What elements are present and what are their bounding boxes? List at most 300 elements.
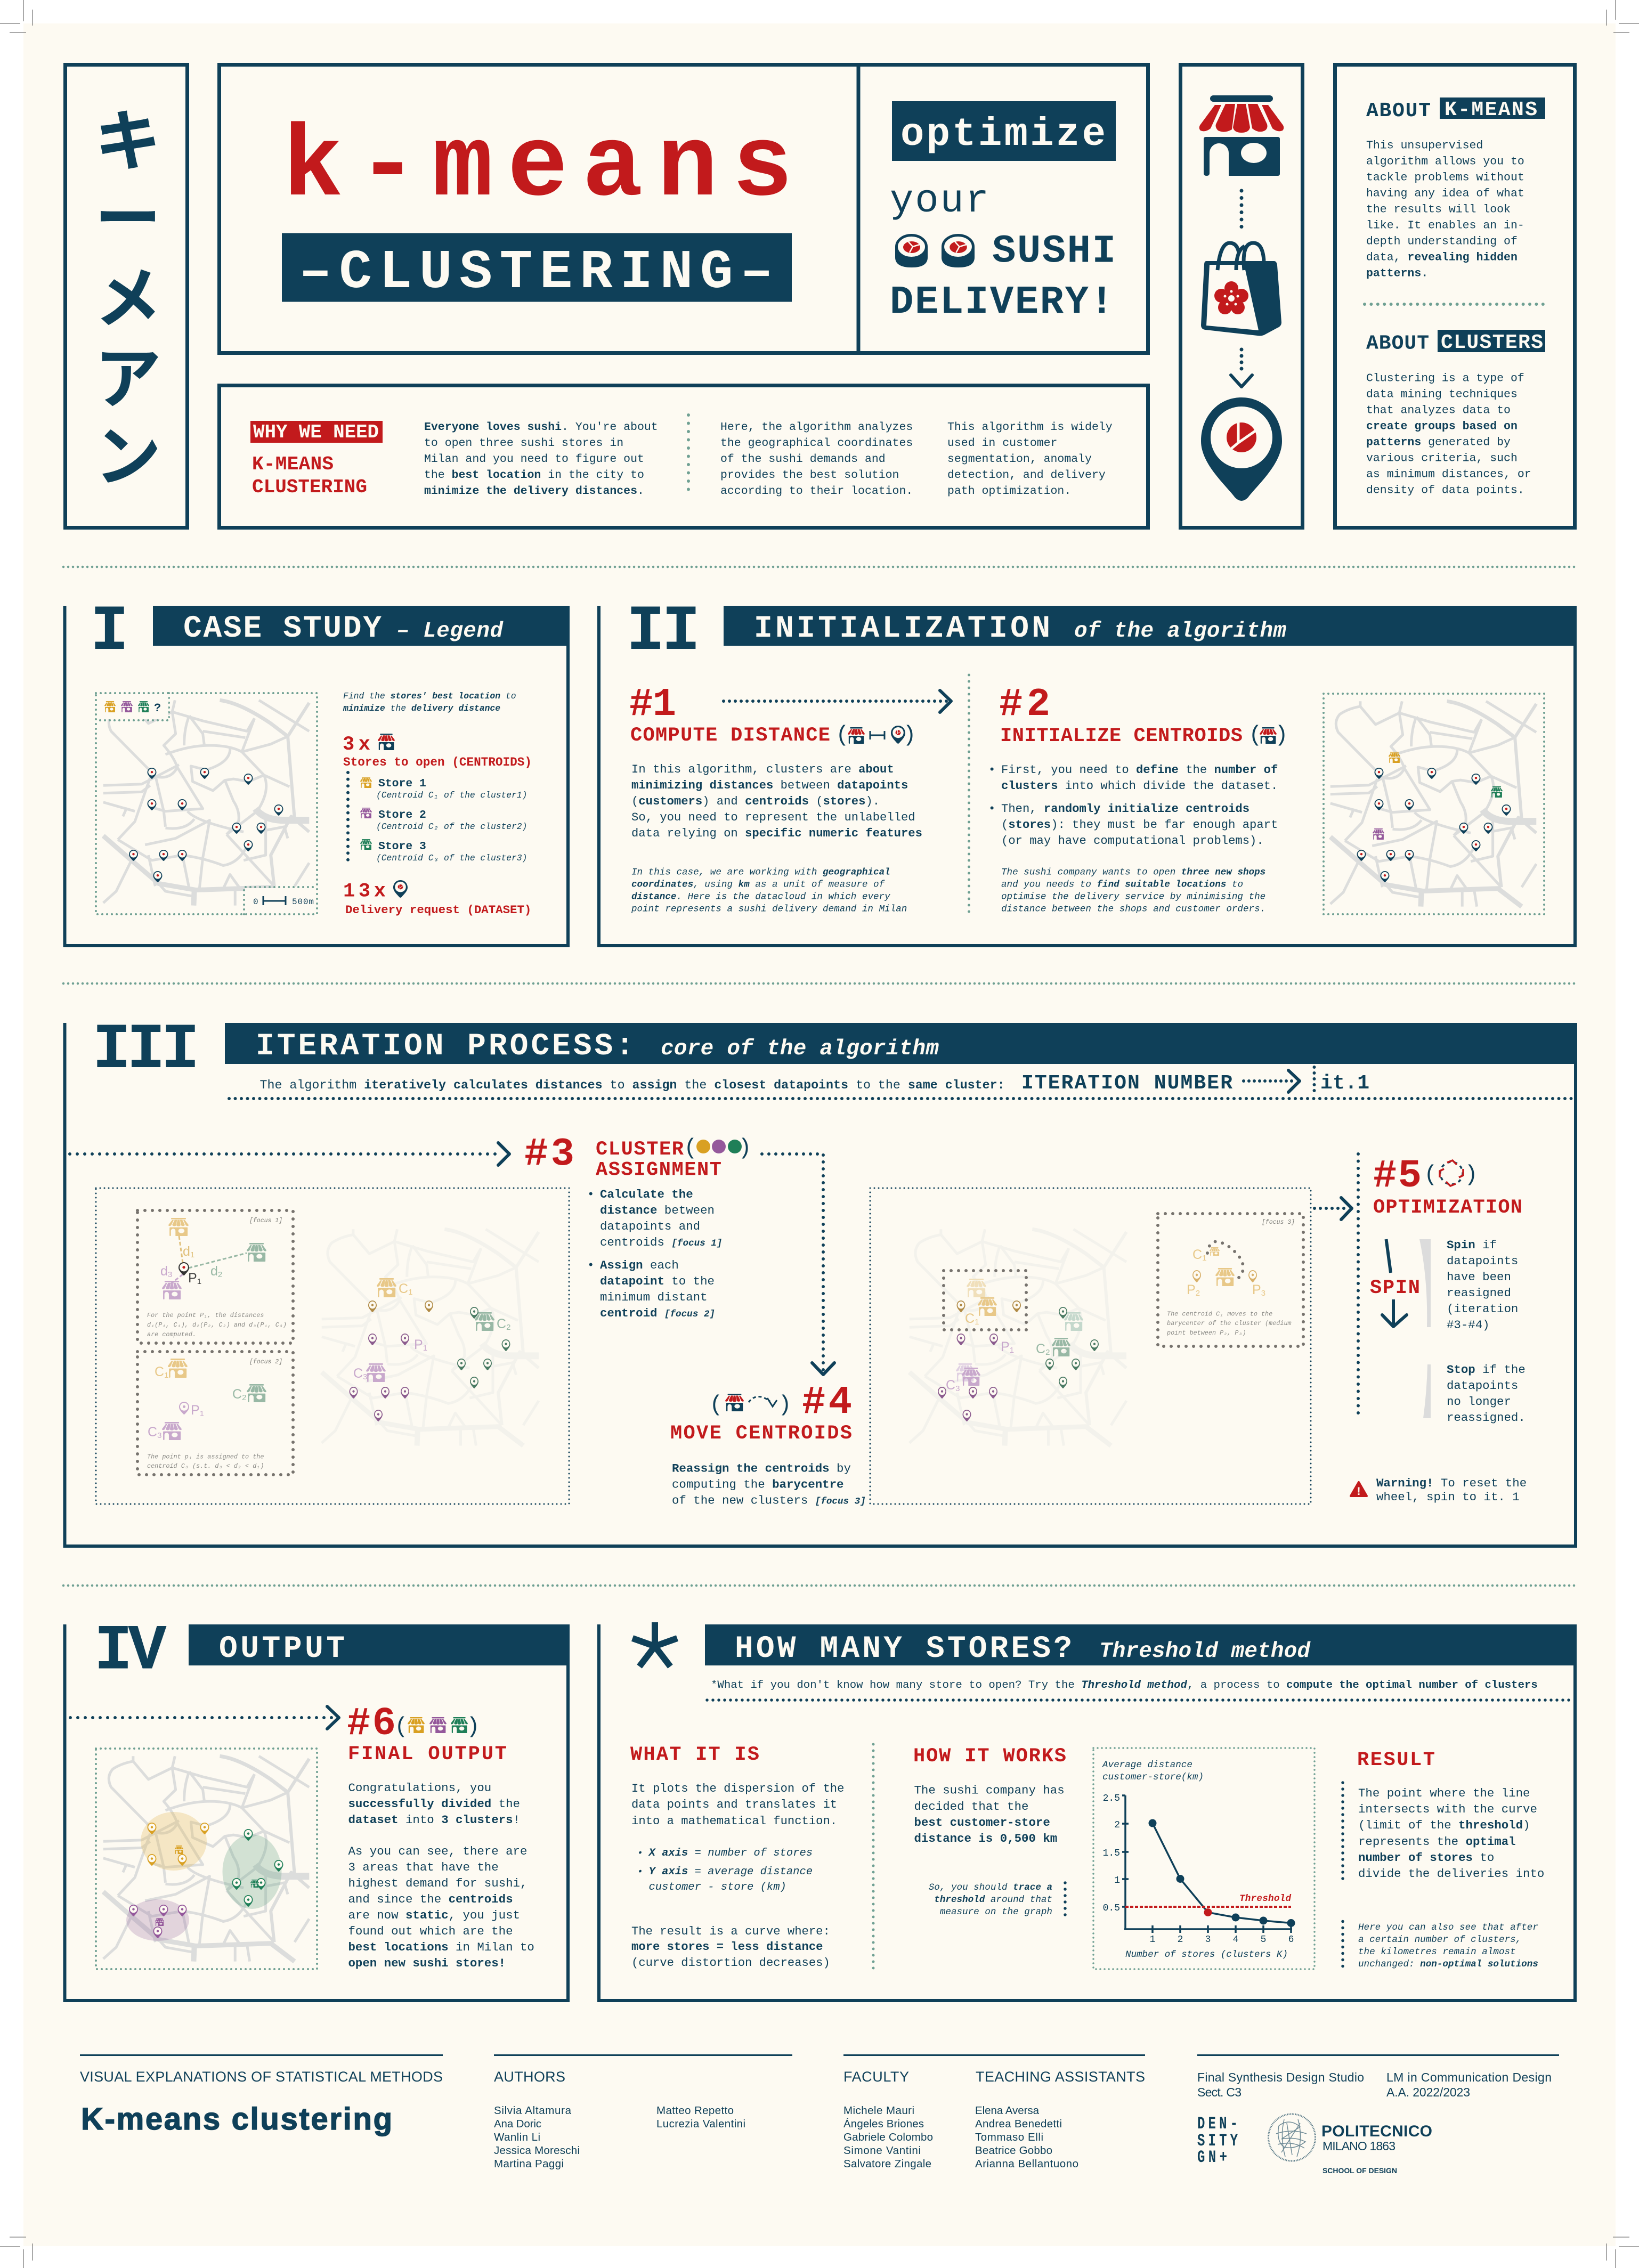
step 4: move centroids: MOVE CENTROIDS [670, 1422, 852, 1445]
stop condition: reassigned. [1447, 1411, 1526, 1425]
focus 1: distances: d [210, 1264, 218, 1279]
focus 1: distances: For the point P₁, the distances [147, 1312, 264, 1319]
step 2: initialize centroids: clusters into which divide the dataset. [1001, 779, 1278, 793]
focus 2: assignment: C [232, 1387, 242, 1402]
arrow: bag to pin [1231, 349, 1252, 387]
icon: shopping bag [1201, 243, 1281, 336]
map markers: assignment: 2 [506, 1323, 510, 1332]
step 4: move centroids [670, 1380, 866, 1508]
katakana characters [95, 105, 161, 494]
column: what it is: X axis = number of stores [648, 1847, 813, 1859]
tagline: optimize your sushi delivery: optimize [900, 112, 1106, 157]
stop condition [1423, 1363, 1526, 1425]
map markers: moved centroids [938, 1271, 1099, 1421]
arrow: step 3 to step 4 [762, 1154, 834, 1375]
stop condition: Stop if the [1447, 1363, 1526, 1377]
column: what it is: into a mathematical function. [631, 1815, 837, 1828]
step 6: final output: open new sushi stores! [348, 1956, 506, 1970]
logo: politecnico wordmark [1321, 2123, 1432, 2175]
footer: project title: VISUAL EXPLANATIONS OF STATISTICAL METHODS [80, 2069, 443, 2085]
step 4: move centroids: of the new clusters [focus 3] [672, 1494, 866, 1508]
text: uses: This algorithm is widely [947, 421, 1113, 434]
logo: density design [1197, 2114, 1238, 2167]
focus 3: barycentre: C [1192, 1247, 1202, 1262]
step 5: optimization: ( [1424, 1162, 1438, 1188]
heading: about clusters [1366, 330, 1545, 355]
katakana characters: キ [95, 105, 161, 179]
banner: how many stores: Threshold method [1099, 1639, 1311, 1664]
chart: threshold curve: 0.5 [1103, 1903, 1120, 1914]
step 2: initialize centroids: ( [1248, 722, 1262, 748]
logo: density design: SITY [1197, 2131, 1238, 2151]
text: about clusters: Clustering is a type of [1366, 372, 1524, 385]
column: how it works: decided that the [914, 1800, 1028, 1814]
chart: threshold curve: 4 [1233, 1934, 1238, 1945]
katakana characters: ー [95, 182, 161, 256]
title: k-means: k-means [282, 111, 793, 225]
text: about clusters: create groups based on [1366, 420, 1518, 433]
map markers: assignment: C [399, 1281, 408, 1296]
footer: faculty and teaching assistants: Michele Mauri [843, 2104, 914, 2117]
step 6: final output: best locations in Milan to [348, 1940, 534, 1954]
footer: authors: Ana Doric [494, 2118, 541, 2130]
heading: about k-means: ABOUT [1366, 100, 1431, 123]
map: delivery points [96, 693, 317, 914]
chart: threshold curve: 6 [1288, 1934, 1294, 1945]
map markers: moved centroids: C [1036, 1342, 1045, 1356]
legend: stores: Store 1 [378, 777, 426, 790]
step 1: compute distance: In this case, we are working with geographical [631, 867, 890, 878]
iteration number: ITERATION NUMBER [1021, 1072, 1232, 1095]
step 6: final output: FINAL OUTPUT [348, 1743, 507, 1766]
label: why we need [250, 421, 383, 498]
arrow: into step 6 [70, 1706, 339, 1729]
column: what it is: more stores = less distance [631, 1940, 823, 1954]
step 2: initialize centroids: The sushi company wants to open three new shops [1001, 867, 1265, 878]
logo: politecnico wordmark: SCHOOL OF DESIGN [1322, 2166, 1397, 2175]
focus 1: distances: 1 [190, 1250, 194, 1259]
focus 3: barycentre [1158, 1214, 1303, 1346]
banner: iteration process: ITERATION PROCESS: [256, 1029, 634, 1064]
footer: faculty and teaching assistants: Arianna Bellantuono [975, 2158, 1078, 2170]
chart: threshold curve: 2 [1114, 1820, 1120, 1831]
footer: faculty and teaching assistants: Ángeles Briones [843, 2118, 924, 2130]
step 2: initialize centroids: INITIALIZE CENTROIDS [1000, 725, 1243, 747]
map markers: assignment: C [497, 1316, 506, 1331]
chart: threshold curve: 2 [1178, 1934, 1183, 1945]
chart: threshold curve: Average distance [1102, 1760, 1192, 1770]
footer: authors: Silvia Altamura [494, 2104, 572, 2117]
panel: main title [220, 64, 1148, 353]
text: intro: minimize the delivery distances. [424, 485, 644, 498]
banner: initialization: INITIALIZATION [754, 612, 1050, 646]
step 4: move centroids: computing the barycentre [672, 1478, 844, 1492]
spin condition: (iteration [1447, 1302, 1518, 1316]
footer: course and logos: LM in Communication Design [1386, 2070, 1552, 2084]
tagline: optimize your sushi delivery: SUSHI [992, 229, 1116, 274]
column: what it is [630, 1744, 844, 1970]
column: what it is: data points and translates it [631, 1798, 837, 1811]
numeral I: I [90, 596, 129, 669]
focus 3: barycentre: [focus 3] [1262, 1219, 1295, 1226]
logo: politecnico wordmark: POLITECNICO [1321, 2123, 1432, 2140]
column: result: unchanged: non-optimal solutions [1358, 1959, 1538, 1970]
footer: course and logos: Sect. C3 [1197, 2085, 1242, 2099]
footer: faculty and teaching assistants: Salvatore Zingale [843, 2158, 931, 2170]
katakana characters: ア [95, 343, 161, 417]
spin condition: reasigned [1447, 1286, 1511, 1300]
text: algorithm: according to their location. [720, 485, 913, 498]
focus 3: barycentre: 1 [1202, 1254, 1206, 1263]
text: about clusters: data mining techniques [1366, 388, 1518, 401]
legend: stores: (Centroid C₁ of the cluster1) [376, 790, 527, 800]
column: result: a certain number of clusters, [1358, 1934, 1521, 1945]
warning: ! [1355, 1485, 1362, 1499]
arrow: into step 3 [70, 1143, 509, 1165]
spin condition [1419, 1238, 1518, 1332]
step 2: initialize centroids: Then, randomly initialize centroids [1001, 802, 1249, 816]
column: how it works: The sushi company has [914, 1784, 1065, 1798]
warning [1351, 1476, 1527, 1504]
legend: delivery requests: 1 3 x [343, 880, 386, 903]
focus 2: assignment: 1 [164, 1371, 168, 1380]
stop condition: datapoints [1447, 1379, 1518, 1393]
step 3: cluster assignment: Assign each [600, 1258, 679, 1272]
step 6: final output: successfully divided the [348, 1797, 520, 1811]
step 3: cluster assignment: #3 [524, 1132, 574, 1177]
map markers: moved centroids: C [965, 1311, 975, 1326]
legend: delivery requests [343, 880, 531, 917]
text: find best location: Find the stores' best location to [343, 691, 516, 701]
step 2: initialize centroids: distance between the shops and customer orders. [1001, 904, 1265, 914]
column: what it is: Y axis = average distance [649, 1866, 813, 1878]
step 6: final output: #6 [347, 1702, 396, 1746]
scale bar: 0 [253, 897, 258, 907]
text: about clusters [1366, 372, 1531, 497]
panel: about [1335, 65, 1575, 527]
legend: stores: Stores to open (CENTROIDS) [343, 755, 532, 769]
footer: project title [80, 2054, 443, 2136]
text: about k-means [1366, 140, 1524, 280]
chart: threshold curve: Threshold [1239, 1893, 1291, 1904]
banner: output [189, 1624, 570, 1667]
text: intro: Everyone loves sushi. You're about [424, 421, 658, 434]
text: about k-means: like. It enables an in- [1366, 220, 1524, 232]
text: find best location: minimize the delivery distance [343, 703, 500, 713]
banner: how many stores: HOW MANY STORES? [735, 1632, 1072, 1667]
focus 3: barycentre: The centroid C₁ moves to the [1167, 1311, 1272, 1318]
step 1: compute distance: (customers) and centroids (stores). [631, 795, 880, 808]
column: what it is: The result is a curve where: [631, 1925, 830, 1938]
footer: faculty and teaching assistants: Elena Aversa [975, 2104, 1040, 2117]
icon: spin wheel [1440, 1160, 1463, 1186]
arrow: map to step 5 [1315, 1198, 1352, 1220]
step 6: final output: ) [466, 1714, 480, 1739]
column: result [1343, 1749, 1544, 1970]
step 3: cluster assignment: datapoints and [600, 1220, 700, 1233]
focus 3: barycentre: 2 [1196, 1289, 1200, 1298]
focus 1: distances: are computed. [147, 1331, 196, 1338]
step 6: final output: As you can see, there are [348, 1844, 527, 1858]
text: algorithm: Here, the algorithm analyzes [720, 421, 913, 434]
focus 2: assignment: centroid C₃ (s.t. d₃ < d₂ < d₁) [147, 1462, 264, 1470]
footer: course and logos [1197, 2054, 1559, 2175]
banner: case study legend: CASE STUDY [183, 612, 382, 646]
text: iteration intro: The algorithm iteratively calculates distances to assign the closest datapoints to the same cluster: [260, 1078, 1005, 1092]
step 3: cluster assignment [524, 1132, 752, 1320]
column: result: Here you can also see that after [1358, 1922, 1538, 1933]
map: final clusters [96, 1749, 317, 1969]
chart: threshold curve: 1.5 [1103, 1848, 1120, 1859]
label: why we need: K-MEANS [252, 453, 334, 475]
arrow: step 1 to step 2 [724, 690, 951, 712]
step 1: compute distance: minimizing distances between datapoints [631, 779, 908, 792]
column: what it is: • [637, 1848, 643, 1859]
text: find best location [343, 691, 516, 713]
text: about k-means: algorithm allows you to [1366, 156, 1524, 168]
text: intro [424, 421, 658, 498]
focus 2: assignment: P [191, 1403, 200, 1418]
step 1: compute distance: point represents a sushi delivery demand in Milan [631, 904, 907, 914]
step 6: final output: 3 areas that have the [348, 1860, 499, 1874]
step 3: cluster assignment: CLUSTER [596, 1139, 684, 1161]
banner: case study legend: – Legend [396, 619, 504, 644]
footer: faculty and teaching assistants [843, 2054, 1145, 2170]
numeral II: II [626, 596, 697, 669]
focus 2: assignment: [focus 2] [249, 1359, 282, 1365]
footer: faculty and teaching assistants: TEACHING ASSISTANTS [976, 2069, 1145, 2085]
step 1: compute distance: COMPUTE DISTANCE [630, 725, 830, 747]
step 4: move centroids: #4 [802, 1380, 852, 1425]
heading: about clusters: ABOUT [1366, 332, 1429, 355]
focus 2: assignment: 1 [200, 1409, 204, 1418]
step 1: compute distance: ) [903, 722, 916, 748]
map: initial centroids [1324, 694, 1544, 914]
warning: wheel, spin to it. 1 [1376, 1490, 1520, 1504]
text: about clusters: that analyzes data to [1366, 404, 1511, 417]
legend: stores: Store 3 [378, 840, 426, 853]
column: result: (limit of the threshold) [1358, 1818, 1530, 1832]
step 1: compute distance: #1 [629, 682, 676, 727]
tagline: optimize your sushi delivery: your [890, 179, 989, 224]
column: how it works: HOW IT WORKS [913, 1745, 1066, 1768]
column: how it works: measure on the graph [940, 1907, 1052, 1917]
chart: threshold curve: 2.5 [1103, 1793, 1120, 1804]
text: uses: segmentation, anomaly [947, 453, 1092, 466]
footer: authors: Lucrezia Valentini [656, 2118, 745, 2130]
step 1: compute distance: data relying on specific numeric features [631, 827, 922, 840]
map markers: assignment: 3 [363, 1372, 367, 1381]
stop condition: no longer [1447, 1395, 1511, 1409]
logo: density design: GN+ [1197, 2148, 1227, 2167]
text: uses: path optimization. [947, 485, 1071, 498]
map markers: assignment: P [414, 1337, 423, 1352]
banner: how many stores [705, 1624, 1577, 1667]
text: algorithm: provides the best solution [720, 469, 899, 482]
step 2: initialize centroids: (or may have computational problems). [1001, 834, 1264, 848]
text: uses: used in customer [947, 437, 1057, 450]
column: result: the kilometres remain almost [1358, 1947, 1516, 1957]
banner: initialization [724, 606, 1577, 646]
map markers: moved centroids: 3 [955, 1384, 960, 1393]
focus 2: assignment: C [148, 1425, 157, 1440]
column: result: The point where the line [1358, 1786, 1530, 1800]
chart: threshold curve [1093, 1748, 1315, 1969]
step 2: initialize centroids: ) [1275, 722, 1288, 748]
scale bar: 500m [292, 897, 314, 907]
column: what it is: • [637, 1867, 643, 1877]
step 2: initialize centroids: and you needs to find suitable locations to [1001, 879, 1243, 890]
focus 2: assignment: 3 [157, 1431, 161, 1440]
step 1: compute distance [629, 682, 951, 914]
footer: faculty and teaching assistants: Gabriele Colombo [843, 2131, 933, 2143]
panel: why we need k-means [220, 386, 1148, 527]
numeral IV: IV [94, 1615, 167, 1688]
spin condition: datapoints [1447, 1254, 1518, 1268]
text: threshold intro: *What if you don't know how many store to open? Try the Threshold method, a process to compute the optimal number of clusters [711, 1679, 1538, 1692]
step 6: final output: are now static, you just [348, 1908, 520, 1922]
spin condition: Spin if [1447, 1238, 1497, 1252]
focus 3: barycentre: 3 [1261, 1289, 1265, 1298]
panel: icon column [1181, 65, 1302, 527]
column: how it works: distance is 0,500 km [914, 1832, 1057, 1846]
focus 1: distances: 3 [168, 1270, 172, 1279]
text: intro: Milan and you need to figure out [424, 453, 644, 466]
text: about clusters: density of data points. [1366, 484, 1524, 497]
text: intro: to open three sushi stores in [424, 437, 623, 450]
step 6: final output: found out which are the [348, 1924, 513, 1938]
legend: delivery requests: Delivery request (DATASET) [345, 903, 531, 917]
warning: Warning! To reset the [1376, 1476, 1527, 1490]
step 6: final output: Congratulations, you [348, 1781, 491, 1795]
map markers: assignment: C [353, 1366, 363, 1381]
footer: course and logos: A.A. 2022/2023 [1386, 2085, 1470, 2099]
scale bar [253, 896, 314, 907]
column: what it is: It plots the dispersion of the [631, 1782, 844, 1795]
footer: authors [494, 2054, 792, 2170]
column: what it is: WHAT IT IS [630, 1744, 759, 1766]
step 4: move centroids: Reassign the centroids by [672, 1462, 851, 1476]
footer: faculty and teaching assistants: Simone Vantini [843, 2144, 921, 2157]
tagline: optimize your sushi delivery [890, 101, 1116, 325]
step 3: cluster assignment: ( [684, 1135, 697, 1161]
column: result: divide the deliveries into [1358, 1867, 1544, 1881]
step 3: cluster assignment: ) [738, 1135, 752, 1161]
text: about clusters: as minimum distances, or [1366, 468, 1531, 481]
focus 2: assignment: C [155, 1364, 164, 1379]
step 2: initialize centroids: optimise the delivery service by minimising the [1001, 892, 1265, 903]
heading: about k-means [1366, 97, 1545, 123]
numeral III: III [92, 1014, 196, 1087]
step 1: compute distance: ( [835, 722, 849, 748]
banner: case study legend [153, 606, 570, 646]
step 5: optimization: #5 [1373, 1154, 1422, 1199]
step 5: optimization: ) [1464, 1162, 1478, 1188]
spin arrow [1370, 1239, 1420, 1327]
logo: politecnico seal [1268, 2114, 1315, 2161]
column: what it is: customer - store (km) [649, 1881, 786, 1893]
chart: threshold curve: Number of stores (clusters K) [1125, 1949, 1288, 1960]
chart: threshold curve: 3 [1205, 1934, 1211, 1945]
focus 1: distances: [focus 1] [249, 1217, 282, 1224]
footer: project title: K-means clustering [81, 2102, 392, 2136]
footer: authors: Jessica Moreschi [494, 2144, 580, 2157]
step 1: compute distance: So, you need to represent the unlabelled [631, 811, 915, 824]
panel: III iteration process [65, 1014, 1577, 1546]
tagline: optimize your sushi delivery: DELIVERY! [890, 280, 1114, 325]
step 6: final output [347, 1702, 534, 1970]
focus 1: distances [137, 1210, 293, 1343]
spin condition: #3-#4) [1447, 1318, 1490, 1332]
text: intro: the best location in the city to [424, 469, 644, 482]
step 2: initialize centroids: (stores): they must be far enough apart [1001, 818, 1278, 832]
logo: politecnico wordmark: MILANO 1863 [1322, 2139, 1395, 2153]
footer: authors: AUTHORS [494, 2069, 565, 2085]
footer: faculty and teaching assistants: FACULTY [843, 2069, 909, 2085]
step 3: cluster assignment: • [587, 1188, 594, 1201]
katakana characters: ン [95, 420, 161, 494]
iteration number [1021, 1067, 1369, 1096]
legend: stores: (Centroid C₂ of the cluster2) [376, 822, 527, 832]
column: how it works: best customer-store [914, 1816, 1050, 1830]
text: algorithm: the geographical coordinates [720, 437, 913, 450]
column: how it works: So, you should trace a [929, 1882, 1052, 1893]
footer: authors: Matteo Repetto [656, 2104, 734, 2117]
legend: stores: 3 x [343, 734, 370, 756]
legend: stores: (Centroid C₃ of the cluster3) [376, 853, 527, 863]
step 2: initialize centroids: #2 [999, 682, 1050, 727]
chart: threshold curve: 1 [1114, 1875, 1120, 1886]
map markers: moved centroids: 2 [1045, 1348, 1050, 1357]
panel: how many stores [599, 1622, 1577, 2001]
focus 3: barycentre: point between P₂, P₃) [1166, 1329, 1246, 1337]
diagram: moved centroids map [870, 1188, 1311, 1504]
step 2: initialize centroids [988, 682, 1288, 914]
icon: asterisk [632, 1622, 677, 1667]
step 5: optimization: OPTIMIZATION [1373, 1197, 1522, 1219]
column: how it works [913, 1745, 1066, 1917]
step 1: compute distance: coordinates, using km as a unit of measure of [631, 879, 885, 890]
column: how it works: threshold around that [934, 1895, 1052, 1905]
map: delivery points: ? [154, 702, 161, 715]
chart: threshold curve: 1 [1150, 1934, 1155, 1945]
step 3: cluster assignment: distance between [600, 1204, 715, 1217]
text: about k-means: the results will look [1366, 204, 1511, 216]
map markers: assignment: 1 [423, 1344, 427, 1353]
spin arrow: SPIN [1370, 1277, 1420, 1299]
banner: output: OUTPUT [219, 1632, 345, 1667]
icon: store [1199, 95, 1284, 176]
step 4: move centroids: ( [709, 1392, 723, 1418]
footer: course and logos: Final Synthesis Design Studio [1197, 2070, 1364, 2084]
footer: authors: Martina Paggi [494, 2158, 564, 2170]
focus 3: barycentre: P [1252, 1282, 1261, 1297]
column: result: represents the optimal [1358, 1835, 1516, 1849]
step 3: cluster assignment: centroid [focus 2] [600, 1306, 715, 1320]
banner: initialization: of the algorithm [1074, 619, 1286, 644]
text: about k-means: depth understanding of [1366, 235, 1518, 248]
chart: threshold curve: 5 [1261, 1934, 1266, 1945]
step 3: cluster assignment: • [587, 1258, 594, 1272]
text: uses [947, 421, 1113, 498]
focus 2: assignment: The point p₁ is assigned to the [147, 1453, 264, 1461]
heading: about clusters: CLUSTERS [1441, 331, 1543, 354]
heading: about k-means: K-MEANS [1445, 99, 1537, 121]
text: about clusters: patterns generated by [1366, 436, 1511, 449]
map markers: moved centroids: C [946, 1378, 955, 1393]
step 3: cluster assignment: Calculate the [600, 1188, 693, 1201]
map markers: moved centroids: P [1001, 1339, 1010, 1354]
